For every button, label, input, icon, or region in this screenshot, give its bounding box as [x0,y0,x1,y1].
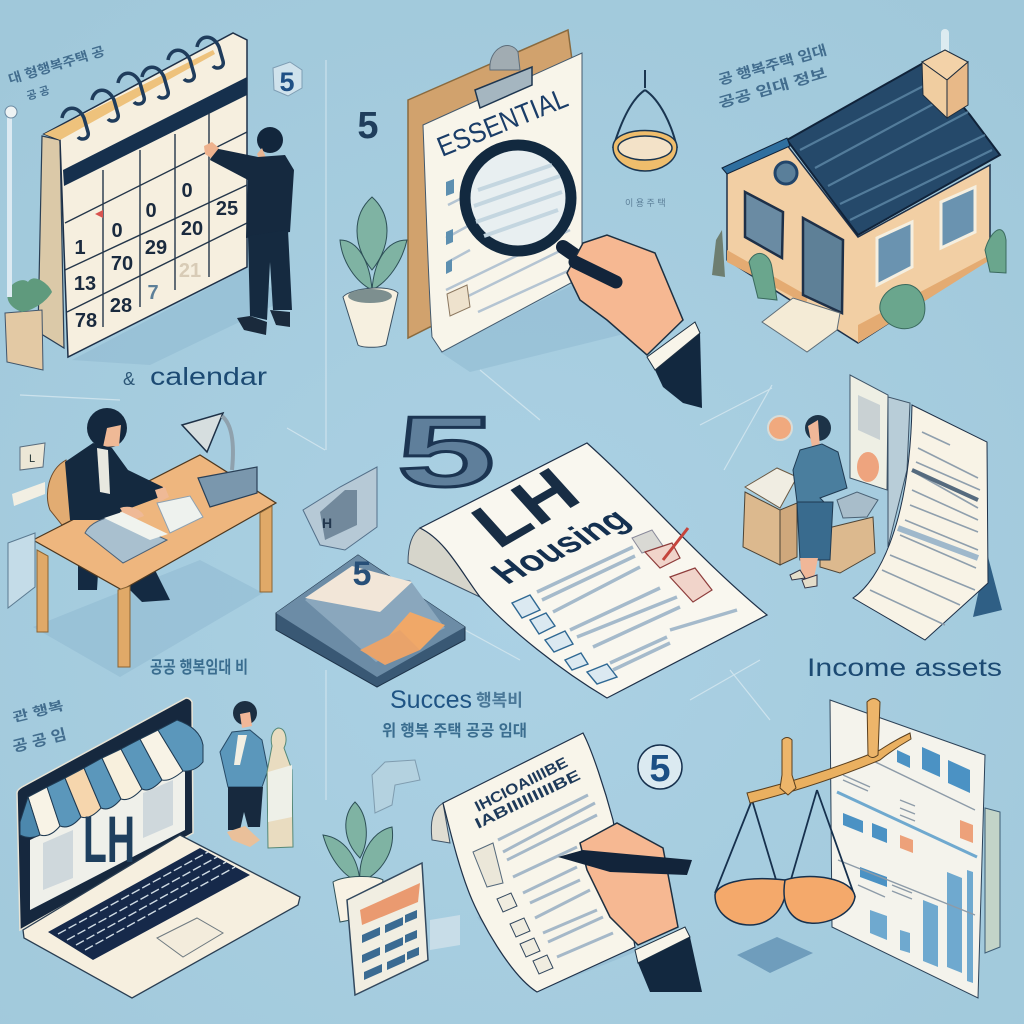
badge: 5: 5 [649,748,671,790]
foundation [727,250,990,343]
laptop base [23,835,300,998]
report shadow [973,553,1002,617]
person legs [78,540,170,602]
shadow block [430,915,460,950]
panel: person at desk [8,408,276,677]
calendar numbers: 70 [111,253,133,275]
label: success: 행복비 [476,691,523,710]
potted plant [340,197,407,347]
report page [853,405,988,640]
awning [20,720,203,838]
wall notes [8,443,45,608]
calendar rings [62,37,223,139]
label: korean: 공공 행복임대 비 [150,658,248,677]
calendar numbers: 28 [110,295,132,317]
calendar numbers [74,180,238,332]
laptop note: 공 공 임 [11,726,68,756]
label: success: 위 행복 주택 공공 임대 [382,721,527,740]
panel: calendar [5,33,302,391]
woman [790,415,847,588]
trackpad [157,918,223,957]
orange bubble [768,416,792,440]
person [65,408,169,522]
panel: form signing [323,733,702,995]
numeral 5: 5 [357,105,379,147]
small note: 이 용 주 택 [625,198,666,208]
panel: laptop [11,698,300,998]
pole [5,106,17,297]
calendar header band [63,77,247,186]
badge: 5 [638,745,682,790]
panel: woman with boxes and report [743,375,1002,640]
label: calendar: & [123,369,135,389]
house wall [727,145,990,343]
label: success: Succes [390,686,472,714]
clip [475,46,532,108]
sleeve [635,927,702,992]
small korean note: 대 형행복주택 공 [6,43,107,87]
calendar back pages [38,136,64,348]
heading: LH: LH [457,455,594,561]
calendar numbers: 78 [75,310,97,332]
plant in bag [5,278,52,370]
calendar numbers: 25 [216,198,238,220]
back page [850,375,888,490]
shrubs [749,230,1006,329]
hanging bowl [613,70,677,171]
calendar numbers: 0 [145,200,157,222]
roof [722,62,1000,235]
plant [323,802,393,882]
big numeral 5: 5 [397,396,495,508]
chimney [922,33,968,118]
small korean note: 공 공 [25,84,51,103]
laptop screen [17,698,193,930]
panel: scale and charts [715,698,1000,998]
pen [558,850,692,875]
panel: LH Housing document [397,396,767,698]
heading: essential: ESSENTIAL [433,82,572,163]
calendar numbers: 21 [179,260,201,282]
badge: 5: 5 [279,67,295,97]
label: calendar [123,363,267,391]
desk lamp [182,413,233,470]
badge: 5 [273,62,302,97]
keyboard [48,848,250,960]
panel: form signing: IABIIIIIIIIIBE [472,767,583,833]
document sheet [420,443,767,698]
hand and sleeve [567,235,702,408]
chart document [830,700,985,998]
panel: house [712,33,1006,352]
steps [762,298,840,352]
boxes [743,468,878,573]
label: income assets: Income assets [807,654,1002,682]
small korean note [6,43,107,103]
calendar numbers: 13 [74,273,96,295]
round window [775,162,797,184]
calendar numbers: 0 [181,180,193,202]
panel: open box: 5 [353,555,371,593]
printer [198,467,257,507]
calculator [347,863,428,995]
house text: 공 행복주택 임대 [716,42,828,88]
right windows [877,187,975,285]
label: success [382,686,527,740]
small printer [303,467,377,550]
label: calendar: calendar [150,363,267,391]
left window [745,192,783,258]
calendar numbers: 20 [181,218,203,240]
ghost outline [372,760,420,813]
person [220,701,293,848]
open book [85,496,203,563]
back document [985,808,1000,953]
desk [33,455,276,590]
person at calendar [204,127,294,335]
panel: essential checklist [340,30,702,408]
door [803,218,843,313]
house text: 공공 임대 정보 [716,65,829,111]
writing hand [580,823,678,945]
clipboard back [408,30,574,338]
heading: Housing: Housing [482,502,638,590]
laptop note: 관 행복 [11,698,65,725]
shadow tile [737,937,813,973]
small printer: H [322,515,332,531]
calendar numbers: 1 [74,237,86,259]
calendar numbers: 7 [147,282,159,304]
laptop note [11,698,68,756]
form curl [431,803,450,843]
calendar numbers: 29 [145,237,167,259]
checklist paper [423,53,582,352]
house text [716,42,829,111]
chair [47,460,72,525]
calendar sheet [44,33,247,357]
plant pot [333,876,383,922]
calendar numbers: 0 [111,220,123,242]
chart tiles [843,747,973,983]
magnifying glass [465,145,615,283]
document curl [408,528,480,597]
form sheet [443,733,635,992]
wall notes: L [29,453,35,465]
panel: form signing: IHCIOAIIIIBE [472,754,571,816]
LH on screen: LH [83,802,135,876]
balance scale [715,698,911,925]
panel: open box [276,467,465,687]
